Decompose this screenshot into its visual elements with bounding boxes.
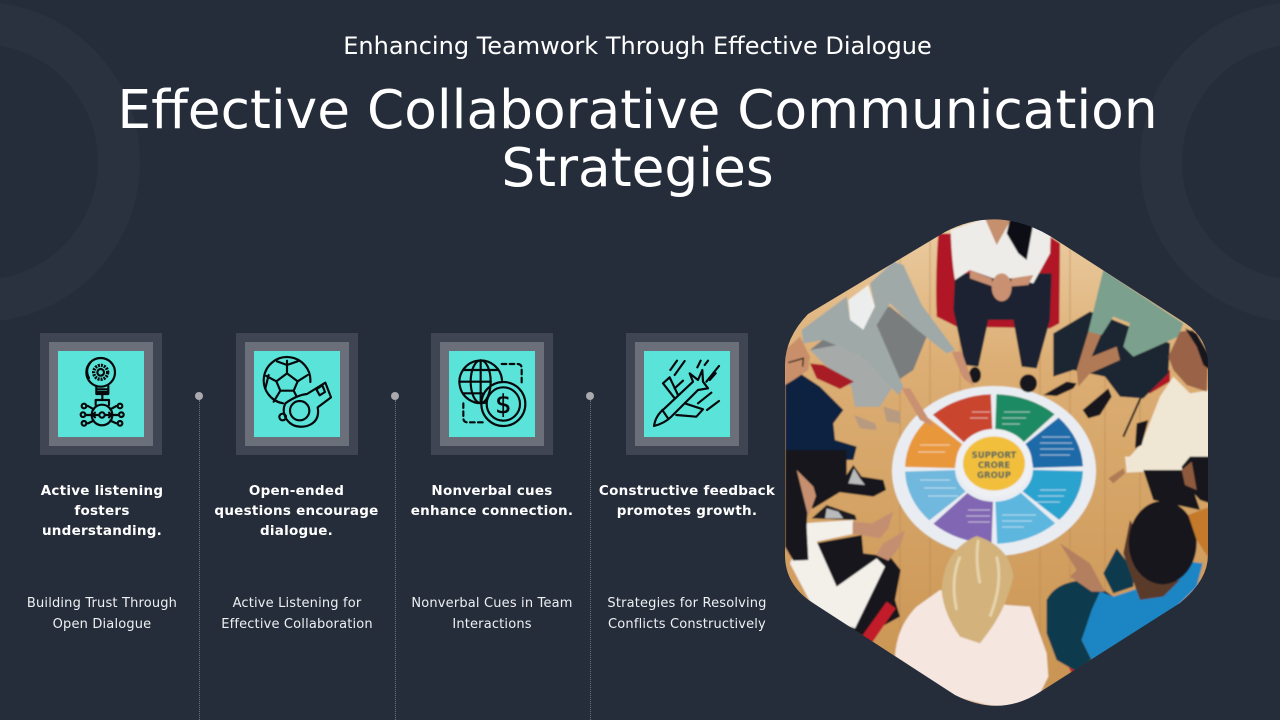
text: card 2 heading: dialogue. bbox=[260, 523, 333, 539]
text: card 3 description bbox=[411, 596, 573, 632]
text: card 3 description: Nonverbal Cues in Team bbox=[411, 596, 573, 611]
text: card 2 heading bbox=[214, 483, 379, 539]
right side figure bbox=[1125, 457, 1188, 473]
connector: dot and line 2 bbox=[391, 392, 399, 720]
text: card 1 heading: Active listening bbox=[41, 483, 163, 499]
photo: group seated around a support wheel, hexagon mask bbox=[785, 219, 1208, 706]
text: card 4 description bbox=[607, 596, 767, 632]
blonde woman in front bbox=[895, 590, 1048, 708]
text: card 1 description: Open Dialogue bbox=[53, 617, 151, 632]
navy person on the left bbox=[810, 363, 854, 389]
connector: dot and line 1 bbox=[195, 392, 203, 720]
title: Effective Collaborative Communication bbox=[117, 78, 1158, 141]
wood floor bbox=[780, 210, 1220, 720]
cream sweater woman bbox=[1127, 377, 1210, 460]
text: card 3 heading: enhance connection. bbox=[411, 503, 573, 519]
icon: globe and dollar coin: $ bbox=[495, 389, 511, 419]
subtitle: Enhancing Teamwork Through Effective Dialogue bbox=[343, 32, 932, 60]
support wheel chart: SUPPORT bbox=[972, 451, 1017, 461]
text: card 2 heading: questions encourage bbox=[214, 503, 379, 519]
icon: soccer ball and whistle bbox=[236, 333, 358, 455]
text: card 1 heading: understanding. bbox=[42, 523, 162, 539]
text: card 2 description: Active Listening for bbox=[233, 596, 361, 611]
support wheel chart bbox=[892, 386, 1096, 556]
text: card 4 heading: Constructive feedback bbox=[599, 483, 775, 499]
icon: globe and dollar coin bbox=[431, 333, 553, 455]
green sweater person bbox=[1148, 369, 1171, 394]
text: card 1 description: Building Trust Through bbox=[27, 596, 177, 611]
connector: dot and line 3 bbox=[586, 392, 594, 720]
icon: plane with speed lines bbox=[626, 333, 748, 455]
left pants and sneakers bbox=[785, 450, 847, 508]
people, upper half bbox=[785, 218, 1210, 460]
grey cardigan person bbox=[810, 306, 927, 380]
text: card 1 heading bbox=[40, 483, 163, 539]
icon: light bulb with gear and network bbox=[40, 333, 162, 455]
support wheel chart: CRORE bbox=[978, 461, 1010, 471]
text: card 4 description: Strategies for Resolving bbox=[607, 596, 767, 611]
title: Strategies bbox=[501, 136, 774, 199]
top woman bbox=[936, 233, 1060, 328]
text: card 3 heading bbox=[411, 483, 573, 519]
text: card 1 heading: fosters bbox=[74, 503, 130, 519]
text: card 4 heading bbox=[599, 483, 776, 519]
text: card 3 description: Interactions bbox=[452, 617, 532, 632]
text: card 4 heading: promotes growth. bbox=[617, 503, 757, 519]
text: card 2 description: Effective Collaboration bbox=[221, 617, 373, 632]
title bbox=[117, 78, 1158, 199]
woman in white bbox=[815, 535, 901, 637]
text: card 1 description bbox=[27, 596, 177, 632]
text: card 4 description: Conflicts Constructively bbox=[608, 617, 766, 632]
support wheel chart: GROUP bbox=[977, 471, 1011, 481]
man in blue bbox=[1103, 548, 1133, 593]
text: card 2 description bbox=[221, 596, 373, 632]
text: card 3 heading: Nonverbal cues bbox=[431, 483, 553, 499]
people, lower half bbox=[785, 450, 1210, 708]
text: card 2 heading: Open-ended bbox=[249, 483, 344, 499]
